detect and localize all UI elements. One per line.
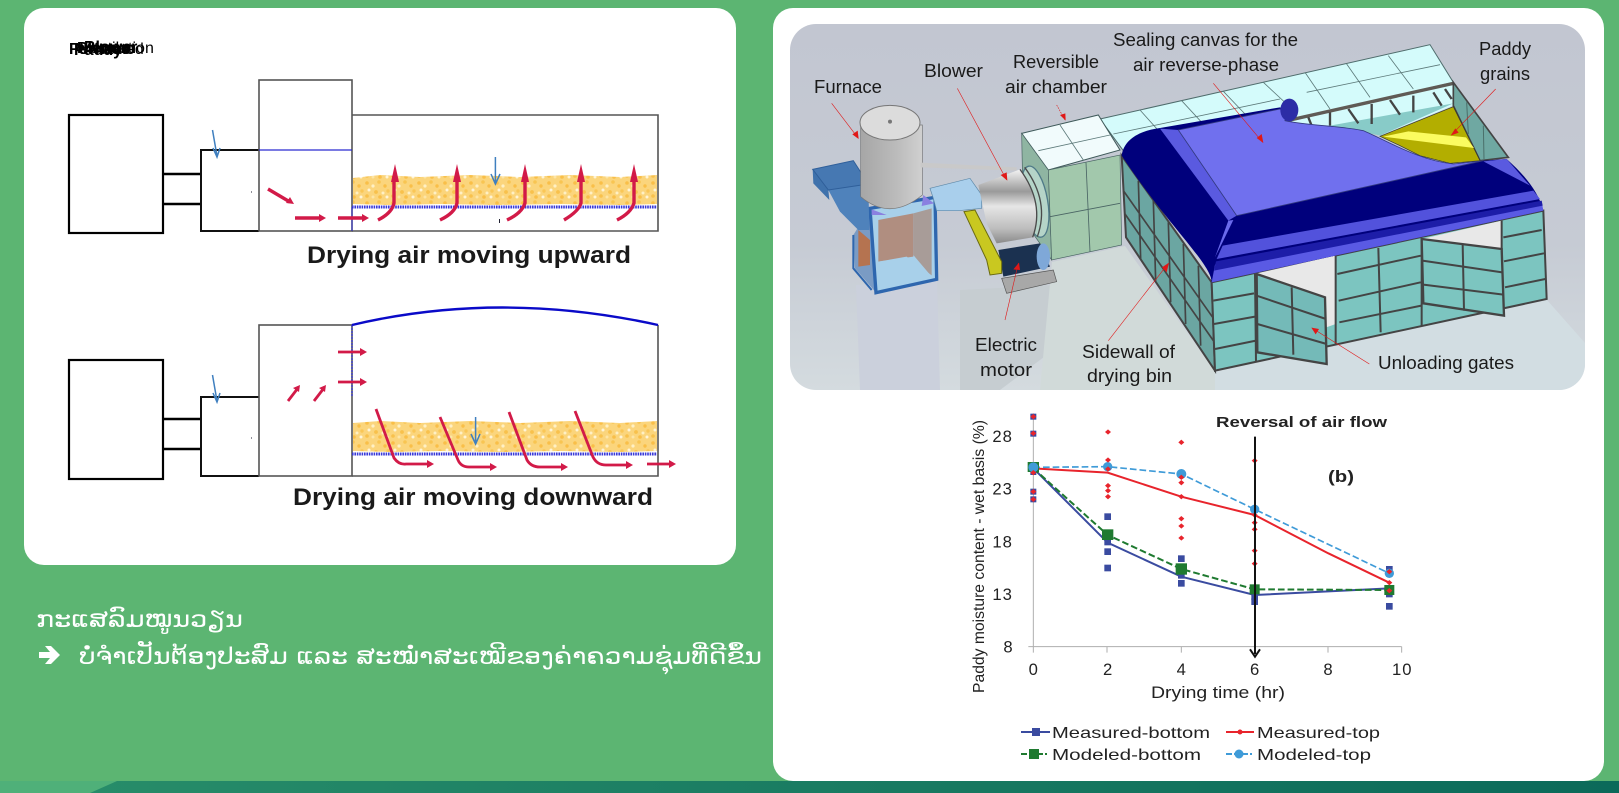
tick labels: 13	[992, 585, 1013, 604]
chart legend: Measured-bottom	[1052, 725, 1210, 742]
illustration labels	[814, 30, 1531, 386]
y axis title: Paddy moisture content - wet basis (%)	[971, 420, 988, 693]
leader arrows	[1108, 83, 1496, 364]
x axis title: Drying time (hr)	[1151, 683, 1285, 702]
blue arrows	[212, 375, 480, 444]
reversal heading: Reversal of air flow	[1216, 414, 1387, 431]
chart legend: Modeled-top	[1257, 747, 1371, 764]
panel tag: (b)	[1328, 467, 1354, 486]
chart legend: Measured-top	[1257, 725, 1380, 742]
Lao explanatory text: ບໍ່ຈຳເປັນຕ້ອງປະສົມ ແລະ ສະໝ່ຳສະເໝີຂອງຄ່າຄວາມຊຸ່ມທີ່ດີຂຶ້ນ	[79, 641, 762, 675]
tick labels	[992, 427, 1413, 679]
tick labels: 10	[1392, 660, 1413, 679]
overlapping component labels: Perforated	[69, 41, 144, 58]
illustration labels: Blower	[924, 61, 983, 81]
back roof strip	[1100, 45, 1453, 151]
tick labels: 8	[1003, 637, 1014, 656]
illustration labels: motor	[980, 360, 1032, 380]
duct lines	[163, 419, 201, 449]
axes	[1028, 413, 1402, 653]
panel: dryer illustration and chart	[773, 8, 1604, 781]
tick labels: 18	[992, 532, 1013, 551]
tick labels: 4	[1177, 660, 1187, 679]
blower drum	[978, 164, 1054, 243]
furnace	[813, 105, 937, 293]
drying bin with sealing canvas	[352, 325, 658, 476]
overlapping component labels: Furnace	[69, 41, 131, 58]
sidewall	[1122, 156, 1215, 371]
reversible chamber	[259, 80, 352, 231]
perforated floor	[352, 206, 657, 208]
Lao explanatory text: ກະແສລົມໝູນວຽນ	[36, 606, 243, 635]
red airflow arrows	[268, 176, 634, 220]
blower box	[201, 397, 259, 476]
illustration labels: Electric	[975, 335, 1037, 355]
pipe and duct	[921, 163, 1017, 211]
leader arrows	[832, 88, 1065, 320]
front wall with openings	[1212, 211, 1547, 371]
overlapping component labels: Ventilation	[80, 40, 154, 57]
tick labels: 8	[1323, 660, 1334, 679]
illustration labels: grains	[1480, 64, 1530, 84]
series lines	[1033, 468, 1389, 595]
tick labels: 2	[1103, 660, 1113, 679]
paddy grain layer	[353, 421, 657, 452]
blower box	[201, 150, 259, 231]
chart legend: Modeled-bottom	[1052, 747, 1201, 764]
illustration labels: Unloading gates	[1378, 353, 1514, 373]
illustration labels: drying bin	[1087, 366, 1172, 386]
furnace, blower, motor and chamber	[813, 88, 1122, 320]
illustration labels: air reverse-phase	[1133, 55, 1279, 75]
heading: upward: Drying air moving upward	[307, 242, 631, 269]
measured-top points	[1030, 414, 1392, 593]
floor reflections	[856, 246, 1600, 390]
lower schematic: drying air moving downward	[69, 308, 676, 479]
icon: arrow bullet	[39, 646, 60, 664]
tick labels: 28	[992, 427, 1013, 446]
Lao explanatory text	[36, 606, 762, 675]
furnace box	[69, 115, 163, 233]
illustration labels: Sealing canvas for the	[1113, 30, 1298, 50]
duct lines	[163, 174, 201, 204]
illustration labels: Sidewall of	[1082, 342, 1176, 362]
chart legend	[1021, 725, 1380, 764]
panel: airflow schematics	[24, 8, 736, 565]
perforated floor	[352, 452, 657, 456]
overlapping component labels: Paddy	[74, 42, 122, 59]
reversible air chamber	[1022, 115, 1122, 260]
blue arrows	[212, 130, 500, 184]
belt and electric motor	[964, 210, 1057, 293]
measured-bottom points	[1030, 414, 1393, 610]
tick labels: 6	[1250, 660, 1260, 679]
illustration labels: air chamber	[1005, 77, 1107, 97]
heading: downward: Drying air moving downward	[293, 484, 653, 511]
red airflow arrows	[288, 352, 671, 467]
drying bin	[352, 115, 658, 231]
3D dryer illustration	[790, 24, 1600, 390]
illustration labels: Reversible	[1013, 52, 1099, 72]
illustration labels: Paddy	[1479, 39, 1531, 59]
furnace box	[69, 360, 163, 479]
upper schematic: drying air moving upward	[69, 80, 658, 233]
modeled-top markers	[1028, 462, 1394, 578]
reversible chamber	[259, 325, 352, 476]
paddy grain layer	[353, 175, 657, 205]
arrow: reversal of air flow	[1250, 437, 1260, 657]
overlapping component labels: Plenum	[77, 40, 135, 57]
tick labels: 23	[992, 479, 1013, 498]
blue sealing canvas roof	[1122, 99, 1543, 282]
overlapping component labels: Blower	[84, 39, 137, 56]
gap behind canvas with paddy grains	[1287, 82, 1508, 163]
line chart: paddy moisture vs drying time	[971, 413, 1413, 764]
unloading gates	[1257, 239, 1504, 364]
tick labels: 0	[1029, 660, 1039, 679]
illustration labels: Furnace	[814, 77, 882, 97]
bottom footer bar	[0, 781, 1619, 793]
drying bin building	[1108, 82, 1547, 371]
modeled-bottom markers	[1028, 462, 1394, 595]
